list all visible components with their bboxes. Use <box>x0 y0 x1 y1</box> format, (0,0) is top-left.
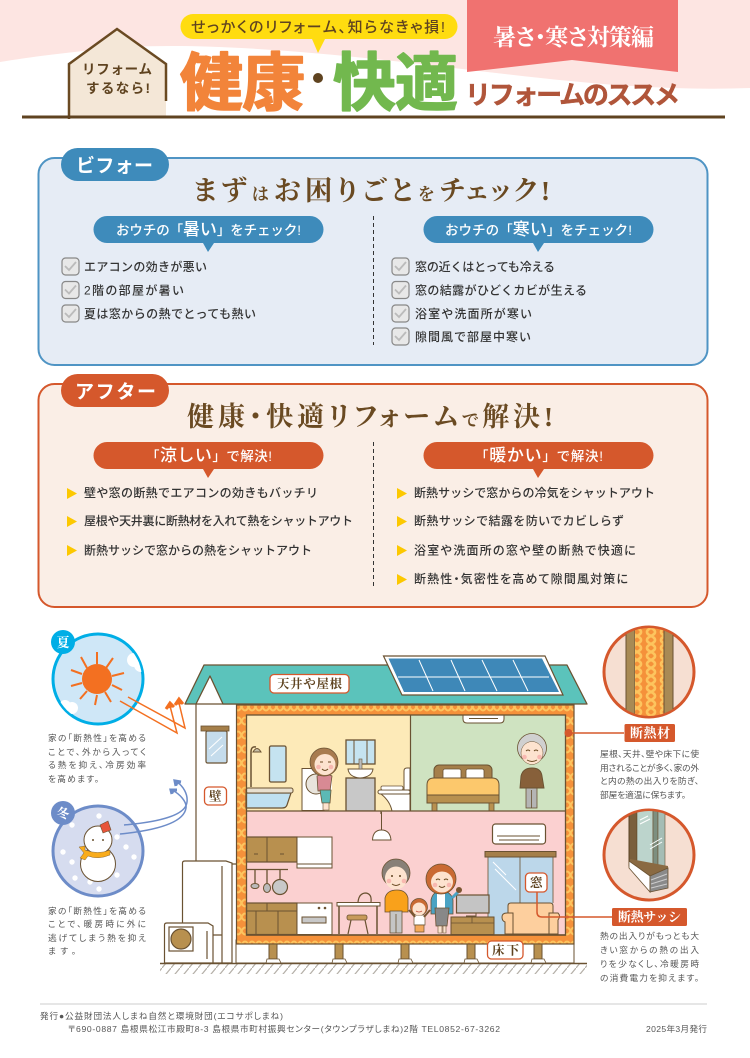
text: winter <box>48 905 146 956</box>
footer: 2025年3月発行 <box>646 1023 707 1034</box>
checklist: cold: 窓の結露がひどくカビが生える <box>415 282 587 298</box>
person: woman in bathroom <box>310 748 338 810</box>
pendant lamp <box>380 812 382 830</box>
ribbon: heat and cold measures: 暑さ・寒さ対策編 <box>493 24 654 50</box>
window section <box>629 810 668 892</box>
text: insulation: と内の熱の出入りを防ぎ、 <box>600 775 699 786</box>
text: winter: 家の「断熱性」を高める <box>48 905 146 916</box>
label: insulation <box>624 724 675 742</box>
checklist: hot: 2階の部屋が暑い <box>84 282 184 298</box>
list: warm solutions: 浴室や洗面所の窓や壁の断熱で快適に <box>414 542 636 558</box>
speech bubble: せっかくのリフォーム、知らなきゃ損! <box>191 19 445 36</box>
list: warm solutions: 断熱サッシで結露を防いでカビしらず <box>414 513 624 528</box>
header rule <box>22 116 725 118</box>
kitchen wall units <box>246 837 297 862</box>
label: sash: 断熱サッシ <box>618 910 681 924</box>
header background <box>0 0 750 89</box>
foundation posts <box>269 944 542 959</box>
sash detail <box>604 810 694 900</box>
checklist: cold: 窓の近くはとっても冷える <box>415 259 555 274</box>
list: cool solutions <box>67 485 353 558</box>
text: sash <box>600 930 699 983</box>
speech bubble <box>181 14 457 53</box>
room: bedroom <box>410 715 566 811</box>
side tower wall <box>196 704 237 864</box>
room: living and kitchen <box>246 715 566 935</box>
label: under floor <box>488 941 523 959</box>
text: sash: の消費電力を抑えます。 <box>600 972 699 983</box>
floor line <box>246 934 566 936</box>
snowman <box>79 821 116 882</box>
sun <box>71 652 124 705</box>
text: summer <box>48 732 146 784</box>
text: winter: ます。 <box>48 946 76 956</box>
text: winter: 逃げてしまう熱を抑え <box>48 932 146 943</box>
insulation shell <box>236 705 574 944</box>
checklist: cold <box>392 258 587 345</box>
text: sash: きい窓からの熱の出入 <box>600 944 699 955</box>
tower window <box>201 726 229 763</box>
main title: リフォームのススメ <box>465 80 680 110</box>
footer: 発行●公益財団法人しまね自然と環境財団(エコサポしまね) <box>40 1010 283 1021</box>
label: window <box>526 873 547 892</box>
roof <box>185 665 587 704</box>
pill: warm solution: 「暖かい」で解決! <box>475 446 603 465</box>
panel: before <box>38 148 708 365</box>
list: cool solutions: 壁や窓の断熱でエアコンの効きもバッチリ <box>84 485 318 500</box>
pill: hot check <box>94 216 324 252</box>
wall section <box>626 625 673 719</box>
person: grandfather <box>518 734 546 808</box>
foundation bases <box>266 959 546 963</box>
pill: warm solution <box>423 442 654 478</box>
water heater <box>182 861 232 963</box>
person: child <box>409 898 430 932</box>
mirror <box>270 746 286 782</box>
label: wall: 壁 <box>209 788 222 804</box>
checklist: cold: 隙間風で部屋中寒い <box>415 329 531 344</box>
bed <box>427 765 499 811</box>
footer: 〒690-0887 島根県松江市殿町8-3 島根県市町村振興センター(タウンプラザしまね)2階 TEL0852-67-3262 <box>68 1023 500 1034</box>
foundation <box>236 940 574 963</box>
footer <box>40 1004 707 1034</box>
toilet <box>404 768 410 790</box>
text: summer: る熱を抑え、冷房効率 <box>48 759 146 770</box>
main title: 健康 <box>180 49 305 119</box>
list: cool solutions: 屋根や天井裏に断熱材を入れて熱をシャットアウト <box>84 513 353 528</box>
ceiling air conditioner <box>463 715 504 723</box>
cold arrows <box>120 781 187 834</box>
house badge: するなら! <box>86 81 150 96</box>
label: window: 窓 <box>529 875 544 890</box>
pill: hot check: おウチの「暑い」をチェック! <box>116 220 301 239</box>
label: roof: 天井や屋根 <box>277 676 342 691</box>
pill: cool solution: 「涼しい」で解決! <box>146 446 272 465</box>
text: summer: ことで、外から入ってく <box>48 746 146 757</box>
pill: cold check <box>423 216 654 252</box>
shower <box>251 747 256 787</box>
panel: after <box>38 374 708 607</box>
pill: cold check: おウチの「寒い」をチェック! <box>445 220 632 239</box>
text: insulation: 用されることが多く、家の外 <box>600 762 699 773</box>
window over sink <box>346 740 375 764</box>
tag: after: アフター <box>75 381 156 403</box>
outdoor unit <box>164 923 213 963</box>
person: father <box>382 859 410 933</box>
text: insulation <box>600 748 699 800</box>
ribbon: heat and cold measures <box>467 0 678 72</box>
tag: before <box>61 148 169 181</box>
sofa <box>508 903 553 934</box>
house badge: リフォーム <box>82 62 152 77</box>
badge: winter: 冬 <box>56 806 70 821</box>
leader line: insulation <box>564 729 624 737</box>
heading: check your problems: まずはお困りごとをチェック! <box>193 176 550 206</box>
clouds <box>59 653 148 714</box>
winter illustration <box>51 801 143 896</box>
tag: before: ビフォー <box>76 155 153 177</box>
text: sash: 熱の出入りがもっとも大 <box>600 930 699 941</box>
list: warm solutions <box>397 485 655 586</box>
checklist: hot: 夏は窓からの熱でとっても熱い <box>84 306 256 321</box>
text: summer: を高めます。 <box>48 773 99 784</box>
text: insulation: 部屋を適温に保ちます。 <box>600 789 686 800</box>
leader line: window to sash <box>537 892 612 917</box>
person: mother <box>426 864 462 933</box>
illustration: house <box>164 656 612 963</box>
main title <box>180 49 680 119</box>
badge: summer: 夏 <box>56 635 70 650</box>
list: warm solutions: 断熱サッシで窓からの冷気をシャットアウト <box>414 485 655 500</box>
label: insulation: 断熱材 <box>630 726 670 740</box>
label: roof <box>270 674 349 693</box>
main title: 快適 <box>333 49 458 119</box>
insulation detail <box>604 625 694 719</box>
TV stand <box>451 917 494 934</box>
text: winter: ことで、暖房時に外に <box>48 918 146 929</box>
bathtub <box>246 793 291 808</box>
label: wall <box>204 787 226 805</box>
washer <box>302 768 324 810</box>
room: bath and toilet <box>246 715 410 811</box>
snowflakes <box>60 813 137 892</box>
summer illustration <box>51 630 148 724</box>
television <box>456 895 489 913</box>
text: summer: 家の「断熱性」を高める <box>48 732 146 743</box>
label: under floor: 床下 <box>492 942 519 958</box>
sink cabinet <box>346 778 375 811</box>
heat arrows <box>120 697 185 733</box>
checklist: cold: 浴室や洗面所が寒い <box>415 306 532 321</box>
checklist: hot <box>62 258 256 322</box>
tag: after <box>61 374 169 407</box>
pill: cool solution <box>94 442 324 478</box>
kitchen base units <box>246 903 297 934</box>
heading: solved by reform: 健康・快適リフォームで解決! <box>187 402 553 432</box>
list: cool solutions: 断熱サッシで窓からの熱をシャットアウト <box>84 542 312 558</box>
utensils <box>246 870 288 885</box>
house badge <box>69 29 166 119</box>
list: warm solutions: 断熱性・気密性を高めて隙間風対策に <box>414 571 628 586</box>
text: sash: りを少なくし、冷暖房時 <box>600 958 699 969</box>
solar panel <box>384 656 563 695</box>
patio window <box>488 857 553 934</box>
ground <box>160 964 587 974</box>
wall air conditioner <box>492 824 546 844</box>
checklist: hot: エアコンの効きが悪い <box>84 259 207 274</box>
text: insulation: 屋根、天井、壁や床下に使 <box>600 748 699 759</box>
dining table and chair <box>337 902 380 906</box>
